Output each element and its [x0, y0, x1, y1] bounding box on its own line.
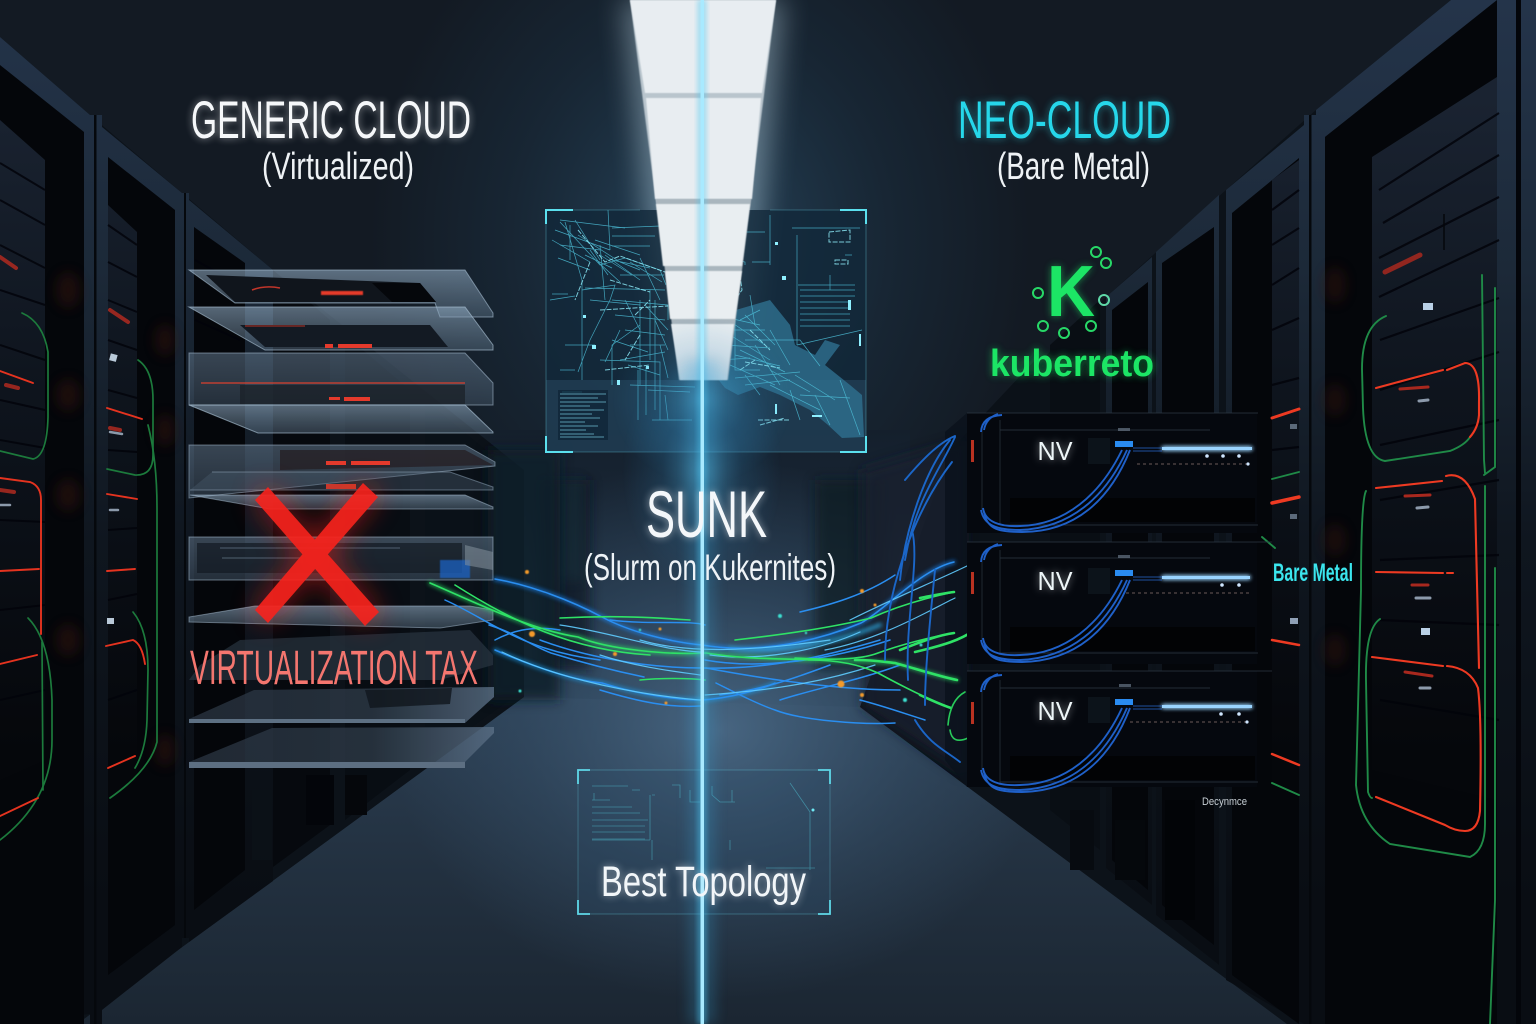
panel: virtualization layers stack: [189, 270, 495, 768]
server-side vertical cable bundle: [885, 436, 960, 762]
subheading: bare metal: (Bare Metal): [997, 146, 1150, 188]
rack 3: [189, 200, 273, 942]
rack 1: [1304, 0, 1536, 1024]
panel: best topology: [578, 770, 830, 914]
label: sunk: SUNK: [646, 477, 767, 551]
layer 10: [189, 727, 494, 768]
layer 2: [189, 307, 493, 350]
layer 9: [189, 687, 494, 723]
rack 3: [1156, 195, 1219, 965]
heading: generic cloud: [191, 91, 471, 188]
aisle depth haze: [488, 440, 965, 775]
glowing status bar: [1162, 447, 1252, 450]
label: virtualization tax: VIRTUALIZATION TAX: [190, 642, 478, 695]
rack circuits: right aisle: [1262, 255, 1495, 1024]
small blueprint sketch: [592, 783, 815, 870]
glowing status bar: [1162, 576, 1250, 579]
logo K: K: [1047, 252, 1095, 332]
blueprint bright nodes: [575, 230, 850, 425]
server racks: right aisle: [860, 0, 1536, 1024]
logo: kuberreto: [990, 247, 1154, 385]
server label: NV: [1038, 566, 1073, 596]
server patch cables: [981, 674, 1130, 792]
layer 8: [189, 630, 493, 680]
layer 1: [189, 270, 493, 317]
server patch cables: [981, 414, 1130, 532]
label: slurm on kukernites: (Slurm on Kukernites): [584, 547, 836, 588]
wire glow: [430, 562, 957, 700]
blueprint traces: [550, 210, 862, 435]
rack 2: [102, 127, 189, 1010]
server unit 1: [967, 413, 1258, 533]
wire sparks: [518, 570, 922, 704]
light overlaying the map: [612, 199, 792, 485]
heading: generic cloud: GENERIC CLOUD: [191, 91, 471, 150]
ceiling light strip: [622, 0, 784, 385]
rack circuits: left aisle: [0, 257, 157, 840]
center divider beam: [622, 0, 782, 1024]
blueprint legend table: [558, 390, 608, 440]
layer 7: [189, 606, 493, 628]
rack 1: [0, 37, 102, 1024]
logo wordmark: kuberreto: [990, 343, 1154, 385]
subheading: virtualized: (Virtualized): [262, 146, 414, 188]
blueprint coverage region: [717, 300, 864, 438]
rack 4: [1106, 257, 1152, 905]
server side ears: [945, 413, 967, 787]
server unit 2: [967, 542, 1272, 664]
layer 6: [189, 537, 493, 580]
logo nodes: [1033, 247, 1111, 338]
icon: red X: [255, 483, 379, 626]
server racks: left aisle: [0, 37, 524, 1024]
layer 3: [189, 353, 493, 405]
panel: blueprint topology map: [546, 210, 866, 452]
heading: neo-cloud: NEO-CLOUD: [958, 91, 1171, 150]
glowing status bar: [1162, 705, 1252, 708]
label: bare metal: Bare Metal: [1273, 559, 1353, 587]
rack 2: [1226, 125, 1304, 1024]
layer 5: [189, 445, 495, 509]
label: small caption: Decynmce: [1202, 796, 1247, 808]
heading: neo-cloud: [958, 91, 1171, 188]
server patch cables: [981, 544, 1130, 662]
server label: NV: [1038, 696, 1073, 726]
label: sunk: [584, 477, 836, 588]
server label: NV: [1038, 436, 1073, 466]
layer 4: [189, 405, 493, 433]
server unit 3: [967, 671, 1272, 792]
data cables: network wires across the aisle: [430, 436, 975, 762]
blueprint corner brackets: [546, 210, 866, 452]
label: best topology: Best Topology: [601, 858, 806, 906]
